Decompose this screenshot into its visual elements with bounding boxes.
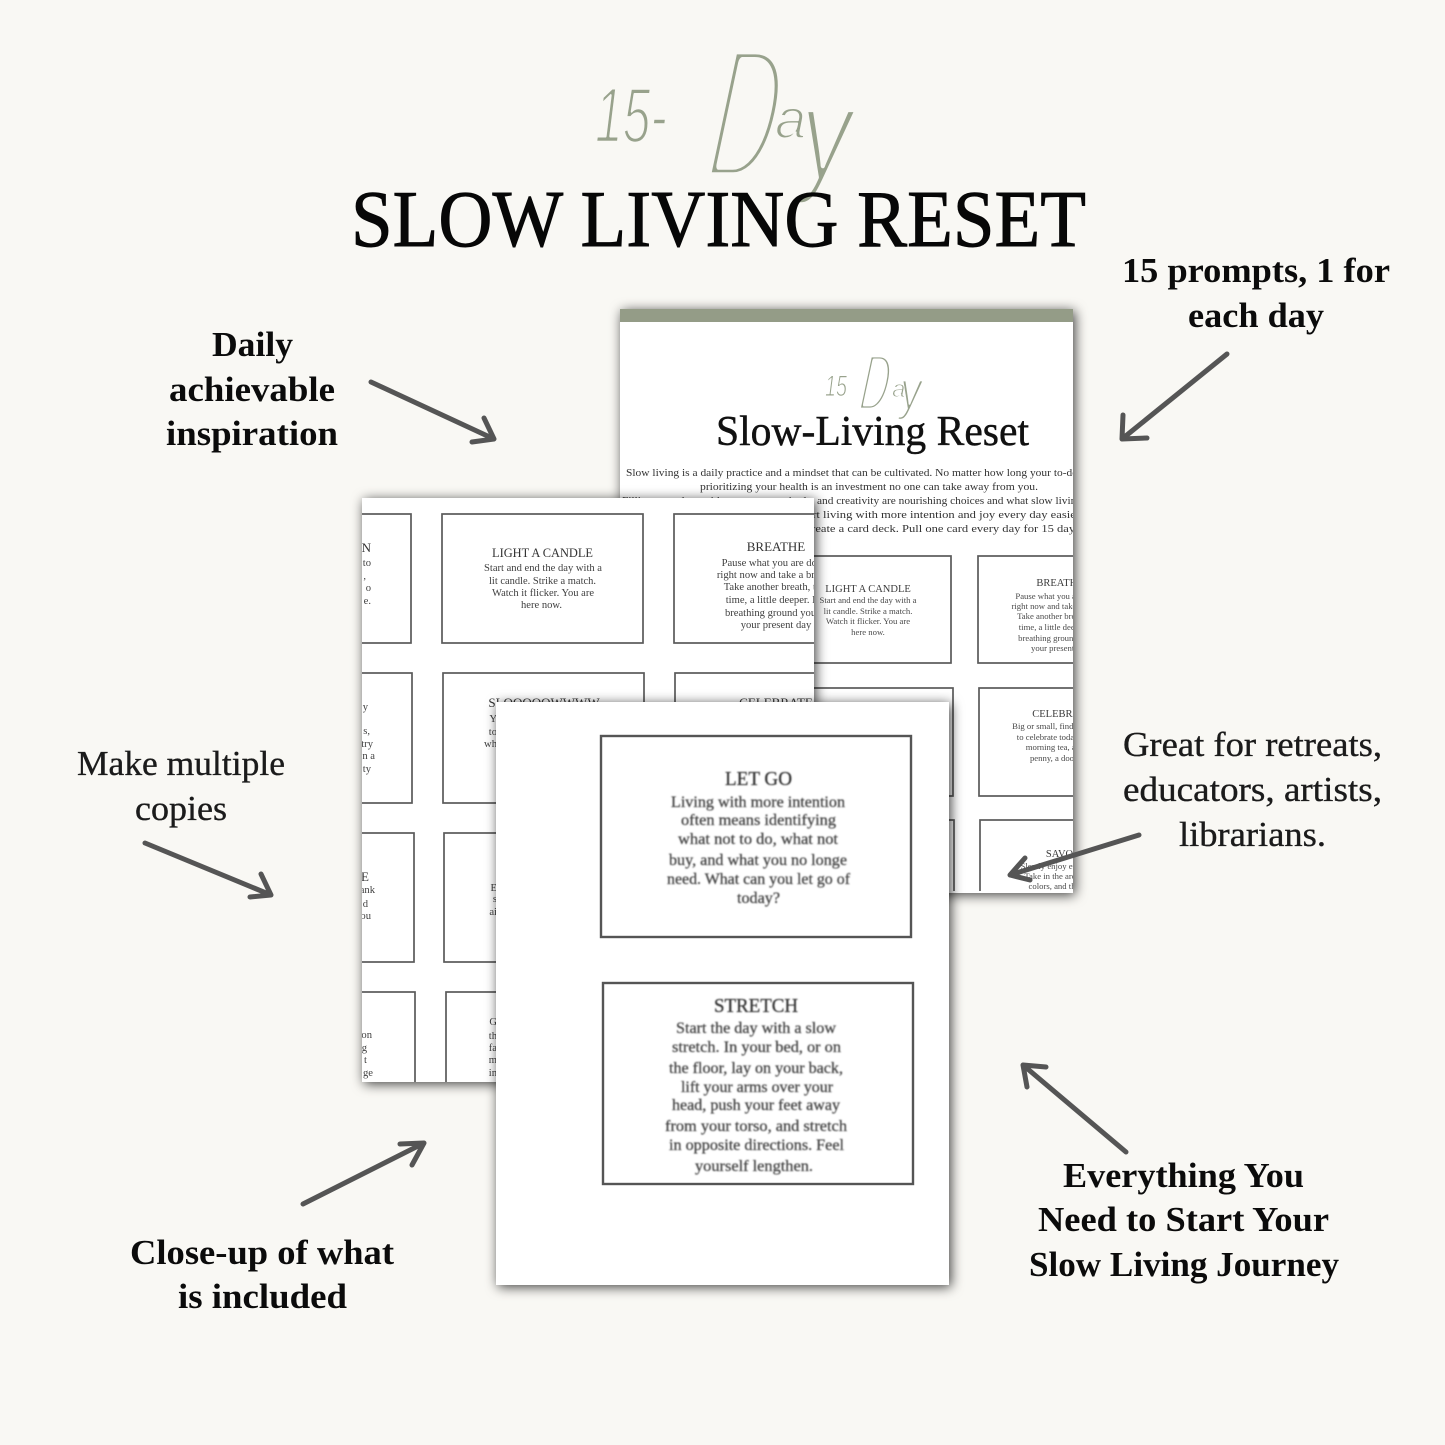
callout: great for retreats: educators, artists, <box>1123 770 1382 809</box>
card text <box>360 539 835 1079</box>
card text: E <box>491 883 497 894</box>
card grid: right now and take a breath. <box>1012 601 1108 611</box>
card: stretch: from your torso, and stretch <box>665 1118 847 1135</box>
arrow: to front page from lower right <box>1023 1065 1126 1152</box>
script heading: 15- Day: y <box>794 60 857 206</box>
card text: time, a little deeper. Let <box>726 595 826 606</box>
card text: to <box>489 727 497 738</box>
callout: great for retreats: librarians. <box>1179 815 1326 854</box>
script heading: 15- Day: D <box>691 9 804 219</box>
header band <box>620 309 1073 322</box>
callout: 15 prompts: each day <box>1188 296 1325 335</box>
callout: make multiple copies: Make multiple <box>77 744 285 783</box>
arrow: to back page from left <box>371 382 494 442</box>
card text: BREATHE <box>747 539 805 554</box>
card: let go: often means identifying <box>681 812 836 829</box>
card text: , <box>363 571 366 582</box>
script heading: 15- Day: 15- <box>595 71 667 159</box>
arrow: to front page <box>303 1143 424 1204</box>
card grid: morning tea, a found <box>1026 742 1099 752</box>
small script heading <box>825 338 924 427</box>
intro paragraph and cards: Learn how ato create a card deck. Pull one card every day for 15 days <box>730 523 1080 535</box>
card text: to <box>363 558 371 569</box>
card text: here now. <box>521 600 562 611</box>
card grid: Watch it flicker. You are <box>826 616 910 626</box>
card grid: lit candle. Strike a match. <box>824 606 912 616</box>
card grid: SAVOR <box>1046 849 1080 860</box>
card text: N <box>362 540 372 555</box>
callout: close-up <box>130 1233 394 1316</box>
callout: daily achievable inspiration: achievable <box>169 370 335 409</box>
callout: everything you need <box>1029 1156 1339 1284</box>
card: let go: LET GO <box>725 768 792 790</box>
card grid: CELEBRATE <box>1032 709 1092 720</box>
card text: ge <box>363 1068 373 1079</box>
card text: Watch it flicker. You are <box>492 588 594 599</box>
panel: back page with intro <box>612 301 1085 905</box>
card grid: your present day <box>1031 643 1090 653</box>
card text: e. <box>364 596 371 607</box>
card: let go <box>601 736 911 937</box>
card text: ank <box>360 885 376 896</box>
panel: middle page of cards <box>354 490 826 1094</box>
card grid: Take in the aroma, the <box>1024 871 1102 881</box>
card text: y <box>363 702 369 713</box>
small script heading: 15 <box>825 370 847 403</box>
callout: everything you need: Everything You <box>1063 1156 1304 1195</box>
card text: d <box>363 899 369 910</box>
card text: m <box>489 1055 498 1066</box>
callout: daily achievable inspiration: inspiration <box>166 414 338 453</box>
card text: s <box>493 894 497 905</box>
card text: th <box>489 1031 498 1042</box>
infographic canvas <box>78 54 1390 1308</box>
panel: front close-up page <box>496 702 949 1285</box>
callout: make multiple copies <box>77 744 285 828</box>
card outlines <box>362 513 814 1082</box>
callout: close-up: is included <box>178 1277 348 1316</box>
card text: your present day <box>741 620 812 631</box>
small script heading: a <box>892 376 905 403</box>
card text: ai <box>489 907 497 918</box>
card: stretch <box>603 983 913 1184</box>
card grid: Slowly enjoy every bite. <box>1021 861 1105 871</box>
card text: t <box>364 1055 367 1066</box>
card text: Take another breath, this <box>724 582 828 593</box>
card grid: time, a little deeper. Let <box>1019 622 1102 632</box>
callout: 15 prompts <box>1122 251 1390 335</box>
callout: everything you need: Slow Living Journey <box>1029 1245 1339 1284</box>
main title: SLOW LIVING RESET <box>351 176 1086 264</box>
card: stretch: yourself lengthen. <box>695 1158 813 1175</box>
arrow: to middle page <box>145 843 271 897</box>
card text: CELEBRATE <box>739 695 813 710</box>
card grid: Take another breath, this <box>1017 611 1103 621</box>
card text: on <box>361 1030 373 1041</box>
card text: n a <box>362 751 375 762</box>
card grid: Start and end the day with a <box>820 595 917 605</box>
intro paragraph and cards <box>622 467 1145 928</box>
card: stretch: the floor, lay on your back, <box>669 1060 843 1077</box>
callout: everything you need: Need to Start Your <box>1038 1200 1329 1239</box>
intro paragraph and cards: You can use this to start living with more intention and joy every day easier <box>700 509 1080 521</box>
card text: right now and take a breath. <box>717 570 835 581</box>
small script heading: y <box>897 362 924 421</box>
small script heading: D <box>852 338 900 427</box>
card: let go: Living with more intention <box>671 794 845 811</box>
card: stretch: Start the day with a slow <box>676 1020 837 1037</box>
card text: Pause what you are doing <box>722 558 831 569</box>
card grid: colors, and the taste <box>1028 881 1098 891</box>
card grid: here now. <box>851 627 885 637</box>
card text: fa <box>489 1043 497 1054</box>
intro paragraph and cards: Filling your days with presence, gratitude, and creativity are nourishing choices and what slow living <box>622 495 1083 507</box>
card: stretch: in opposite directions. Feel <box>669 1137 844 1154</box>
card text: SLOOOOOWWWW <box>488 695 600 710</box>
script heading: 15- Day <box>595 9 857 219</box>
card text: G <box>489 1017 497 1028</box>
card: stretch: stretch. In your bed, or on <box>672 1039 841 1056</box>
callout: daily achievable inspiration <box>166 325 338 453</box>
callout: 15 prompts: 15 prompts, 1 for <box>1122 251 1390 290</box>
card grid: penny, a door held <box>1030 753 1095 763</box>
arrow: to back page from right <box>1122 354 1227 439</box>
card grid: Pause what you are doing <box>1015 591 1105 601</box>
card text: Start and end the day with a <box>484 563 602 574</box>
card: let go: what not to do, what not <box>678 831 839 848</box>
card text: breathing ground you in <box>725 608 828 619</box>
card text: in <box>489 1068 498 1079</box>
card text: LIGHT A CANDLE <box>492 545 593 560</box>
callout: close-up: Close-up of what <box>130 1233 394 1272</box>
card: let go: buy, and what you no longe <box>669 852 847 869</box>
card: let go: need. What can you let go of <box>667 871 851 888</box>
page title: Slow-Living Reset <box>716 409 1029 455</box>
card text: ou <box>360 911 372 922</box>
card grid: Big or small, find something <box>1012 721 1112 731</box>
card grid: LIGHT A CANDLE <box>825 584 911 595</box>
card text: o <box>366 583 371 594</box>
callout: great for retreats: Great for retreats, <box>1123 725 1382 764</box>
card grid: BREATHE <box>1036 578 1084 589</box>
card: stretch: STRETCH <box>714 995 798 1017</box>
callout: daily achievable inspiration: Daily <box>212 325 293 364</box>
script heading: 15- Day: a <box>775 87 806 150</box>
card text: g <box>362 1043 368 1054</box>
card text: lit candle. Strike a match. <box>489 576 596 587</box>
card: stretch: head, push your feet away <box>672 1097 840 1114</box>
intro paragraph and cards: Slow living is a daily practice and a mindset that can be cultivated. No matter how long your to-do <box>626 467 1079 479</box>
card grid: to celebrate today. A good <box>1017 732 1108 742</box>
callout: great for retreats <box>1123 725 1382 854</box>
card text: ty <box>363 764 372 775</box>
card text: Y <box>489 714 497 725</box>
card text: try <box>361 739 374 750</box>
card text: E <box>361 869 369 884</box>
card: stretch: lift your arms over your <box>681 1079 834 1096</box>
intro paragraph and cards: prioritizing your health is an investment no one can take away from you. <box>700 481 1038 493</box>
card text: wh <box>484 739 498 750</box>
card grid <box>814 555 1073 891</box>
card: let go: today? <box>737 890 780 907</box>
arrow: to back page lower right <box>1010 835 1139 880</box>
callout: make multiple copies: copies <box>135 789 227 828</box>
card grid: breathing ground you in <box>1018 633 1103 643</box>
card text: s, <box>363 726 370 737</box>
